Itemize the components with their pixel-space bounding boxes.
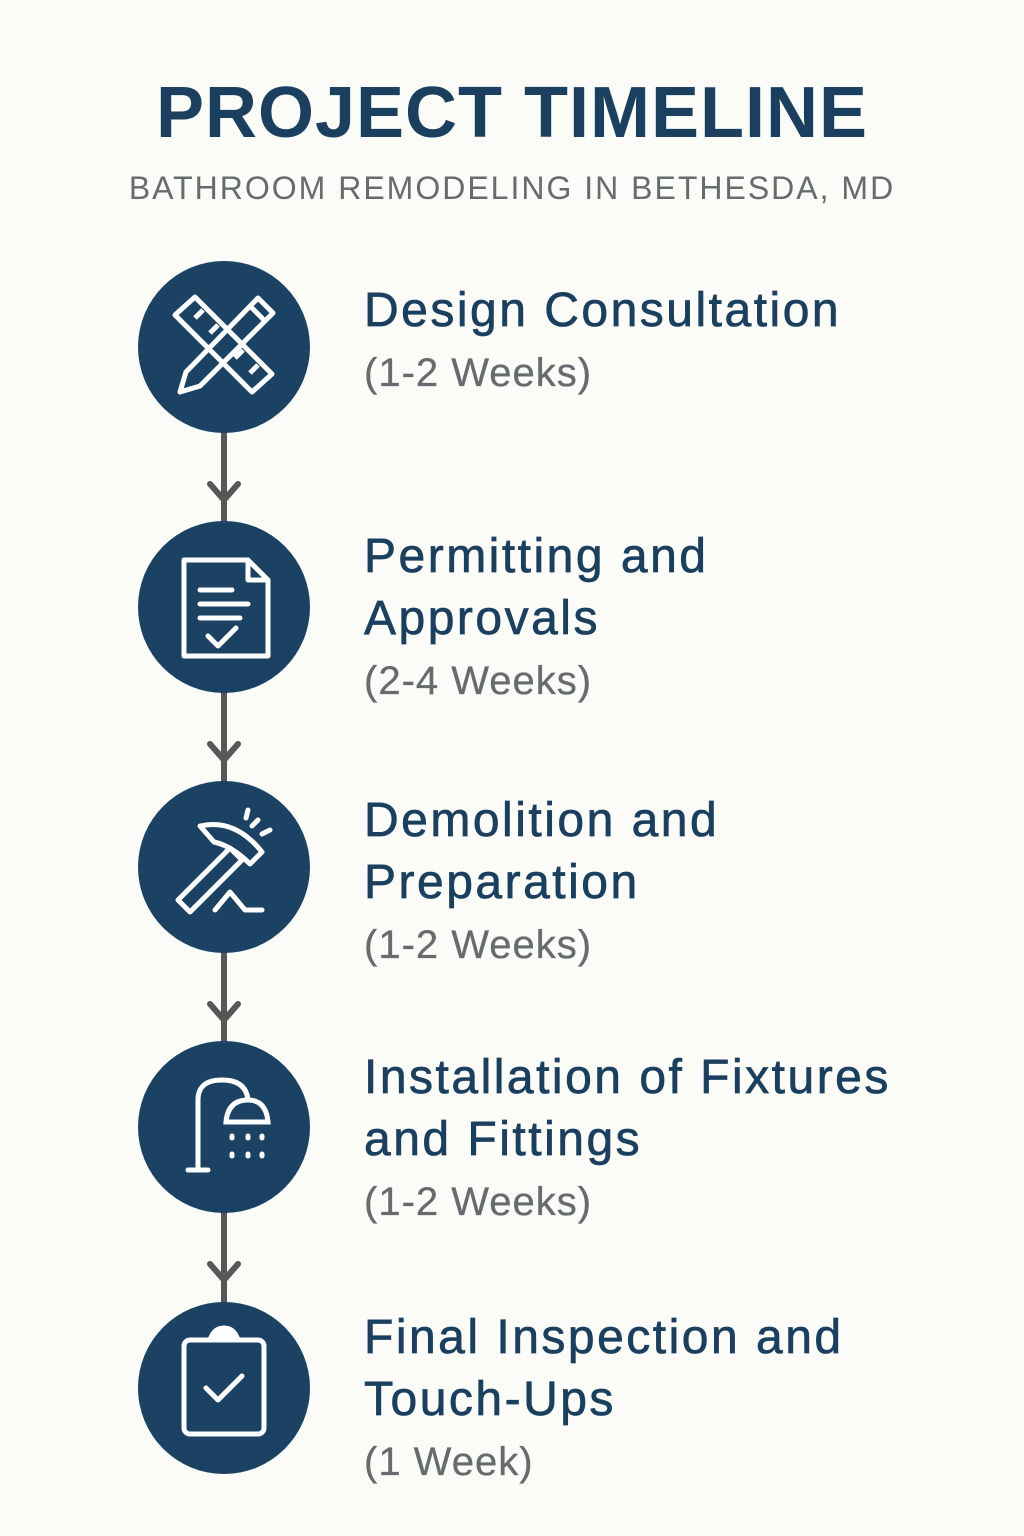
step 2 text: Permitting and [364,530,708,583]
step 2 text [364,530,708,703]
step 4 text [364,1051,891,1224]
step 1 text: Design Consultation [364,284,841,337]
step 5 text: (1 Week) [364,1440,534,1484]
step 3 text: Preparation [364,856,640,909]
step 2 text: Approvals [364,592,600,645]
step 5 text: Final Inspection and [364,1311,844,1364]
icon: hammer [138,781,310,953]
icon: shower [138,1041,310,1213]
step 3 text: Demolition and [364,794,719,847]
step 4 text: and Fittings [364,1113,642,1166]
step 3 text: (1-2 Weeks) [364,923,592,967]
title: PROJECT TIMELINE [156,73,868,153]
step 1 text: (1-2 Weeks) [364,351,592,395]
step 4 text: (1-2 Weeks) [364,1180,592,1224]
step 5 text: Touch-Ups [364,1373,616,1426]
icon: document [138,521,310,693]
step 3 text [364,794,719,967]
step 4 text: Installation of Fixtures [364,1051,891,1104]
icon: ruler and pencil [138,261,310,433]
step 1 text [364,284,841,395]
subtitle: BATHROOM REMODELING IN BETHESDA, MD [129,170,895,206]
step 5 text [364,1311,844,1484]
icon: clipboard [138,1302,310,1474]
step 2 text: (2-4 Weeks) [364,659,592,703]
